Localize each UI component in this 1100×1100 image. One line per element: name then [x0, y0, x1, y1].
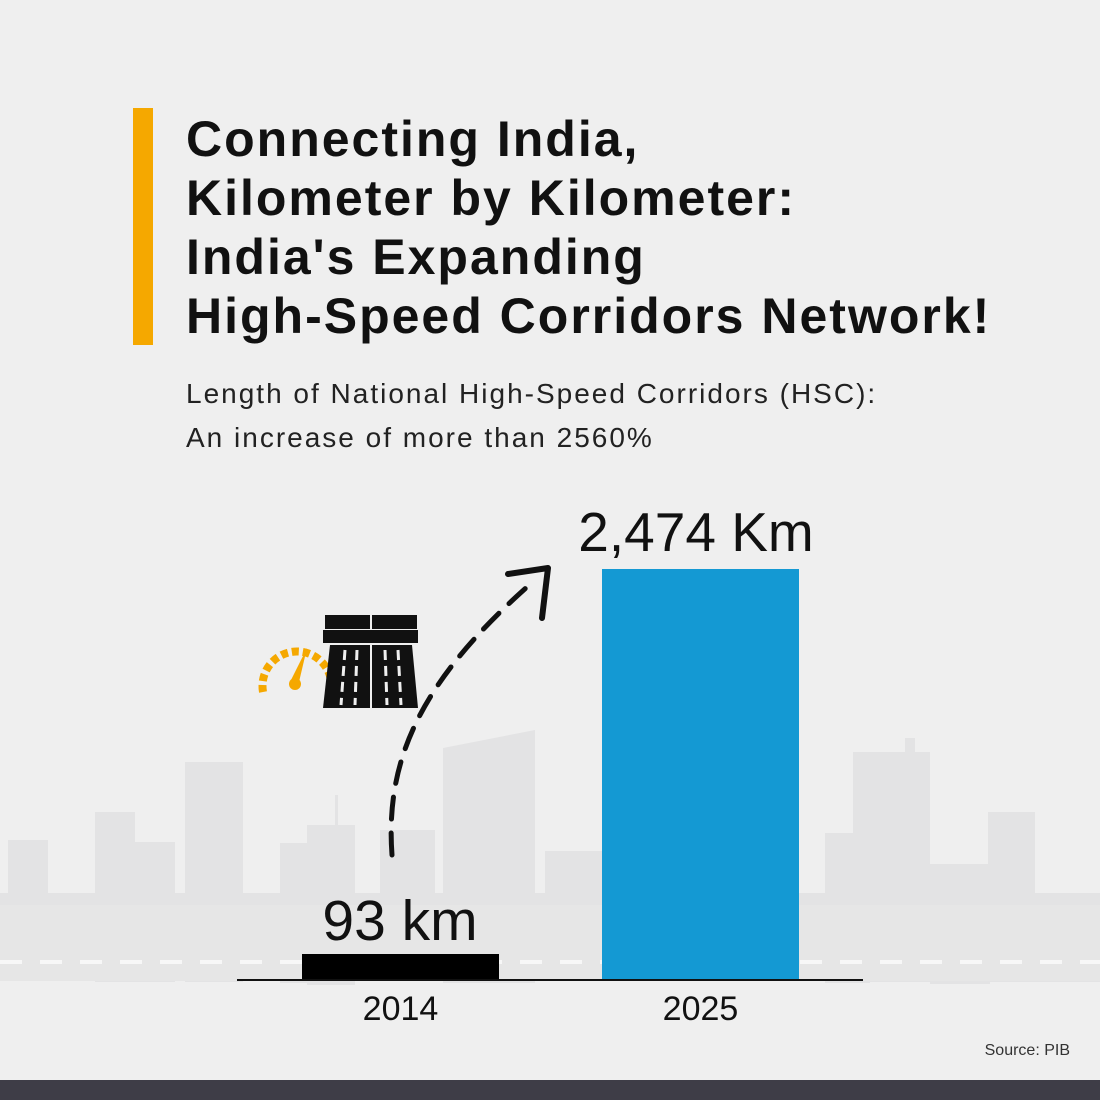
source: Source: PIB: [985, 1042, 1070, 1059]
title: [186, 111, 991, 344]
title: Connecting India,: [186, 111, 639, 167]
bar chart: [237, 501, 863, 1028]
bar: 2025: [602, 569, 799, 980]
subtitle: An increase of more than 2560%: [186, 422, 654, 453]
footer bar: [0, 1080, 1100, 1100]
icon: highway with speedometer: [258, 615, 418, 708]
title: Kilometer by Kilometer:: [186, 170, 796, 226]
label: 2,474 Km: 2,474 Km: [578, 501, 814, 563]
subtitle: [186, 378, 877, 453]
year 2025: 2025: [663, 990, 738, 1028]
title: India's Expanding: [186, 229, 646, 285]
title: High-Speed Corridors Network!: [186, 288, 991, 344]
title accent bar: [133, 108, 153, 345]
year 2014: 2014: [363, 990, 438, 1028]
arrow: dashed growth arrow: [388, 565, 551, 858]
bar: 2014: [302, 954, 499, 980]
axis line: [237, 979, 863, 981]
label: 93 km: 93 km: [322, 889, 478, 953]
subtitle: Length of National High-Speed Corridors (HSC):: [186, 378, 877, 409]
